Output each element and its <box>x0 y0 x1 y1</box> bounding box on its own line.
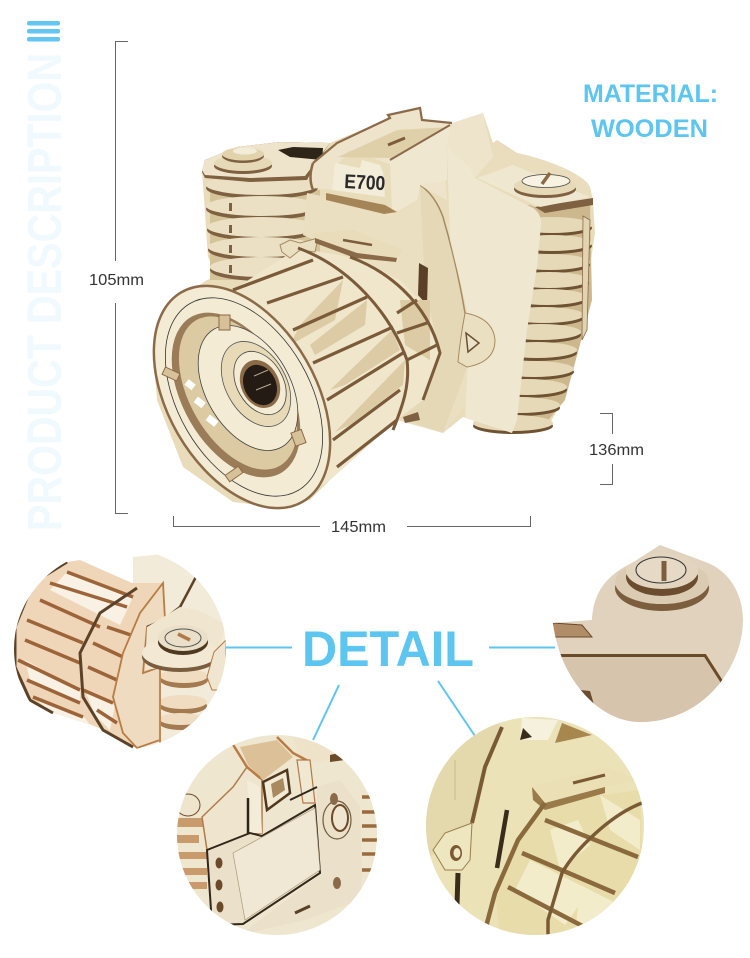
pentaprism housing <box>310 108 493 212</box>
lens ring tabs <box>162 315 306 482</box>
barrel slats <box>233 260 437 467</box>
material label: WOODEN <box>591 115 708 143</box>
camera silhouette <box>153 108 595 508</box>
label: E700: E700 <box>344 171 386 195</box>
icon: menu bars <box>27 21 60 42</box>
heading: detail: DETAIL <box>302 621 474 677</box>
label: E700 <box>326 160 397 214</box>
dimension: 136mm <box>589 414 644 484</box>
main photo: wooden camera <box>117 108 595 539</box>
detail circle: top dial close-up <box>553 545 743 722</box>
lens barrel <box>233 230 440 500</box>
left dial stack <box>202 142 330 281</box>
barrel shading <box>290 280 430 432</box>
dimension: 105mm <box>89 42 144 514</box>
lens front ring <box>117 255 367 539</box>
dimension: 136mm: 136mm <box>589 442 644 459</box>
dimension: 145mm: 145mm <box>331 519 386 536</box>
connector lines <box>226 648 555 740</box>
material label <box>583 80 718 143</box>
detail circle: lens and dial <box>15 553 226 748</box>
detail circle: lens mount close-up <box>426 717 645 935</box>
lens mount shoe <box>280 230 403 262</box>
material label: MATERIAL: <box>583 80 718 108</box>
right dial stack <box>473 140 593 434</box>
dimension: 105mm: 105mm <box>89 272 144 289</box>
dimension: 145mm <box>174 516 530 536</box>
detail circle: camera back <box>176 735 378 935</box>
camera body plate <box>303 147 541 433</box>
